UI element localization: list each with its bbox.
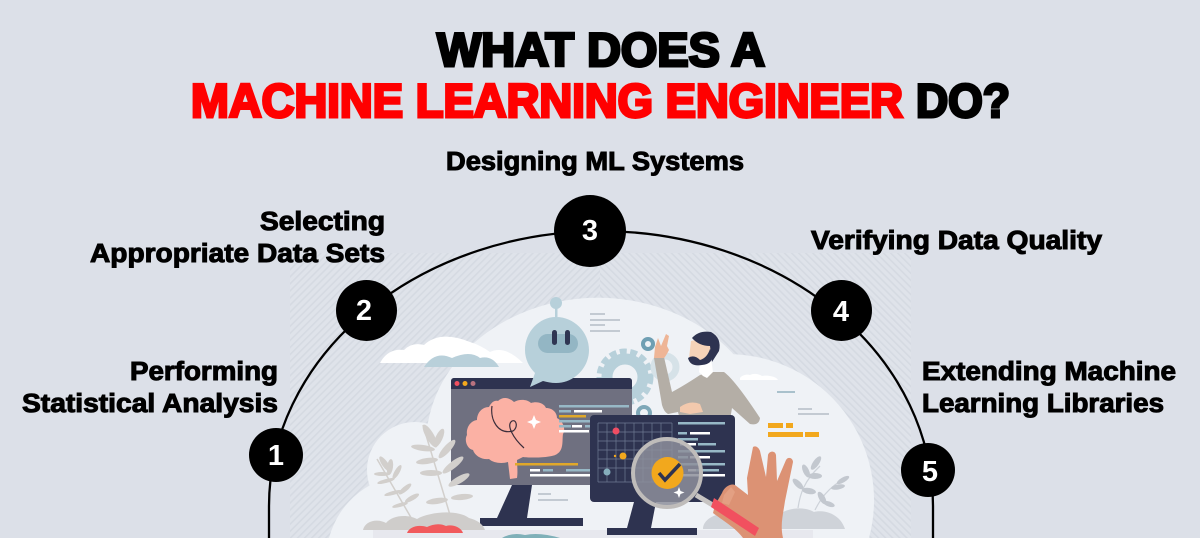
step 2: label: Selecting [260,208,385,236]
title: MACHINE LEARNING ENGINEER [191,74,903,127]
step 1: label: Performing [130,358,278,386]
title: DO? [916,74,1010,127]
engineer [654,332,760,424]
illustration: machine learning engineer scene [290,253,911,538]
right monitor with chart [590,415,735,535]
step 5: label [922,358,1176,418]
brain [466,398,564,479]
step 4: label: Verifying Data Quality [811,227,1103,255]
step 5: label: Extending Machine [922,358,1176,386]
pale background blobs [329,298,874,538]
hand holding magnifier [711,446,793,538]
step 1: label: Statistical Analysis [22,390,278,418]
step 4: circle: 4 [833,296,849,328]
step 1: circle: 1 [268,440,284,472]
step 5: circle: 5 [922,456,938,488]
step 5: circle [901,443,955,497]
step 1: circle [249,428,303,482]
step 3: circle: 3 [582,215,598,247]
beard [688,349,713,365]
raised hand [654,334,669,358]
step 3: circle [554,195,626,267]
left monitor [451,378,632,526]
right plants [703,455,850,529]
magnifier with checkmark [633,439,716,507]
step 2: circle: 2 [356,295,372,327]
hand on chest [680,403,703,414]
left plants [363,423,485,533]
step 2: label [90,208,385,268]
title: WHAT DOES A [437,23,765,76]
face [689,337,712,364]
step 1: label [22,358,278,418]
cloud [380,337,523,367]
teal mound at bottom [502,534,560,538]
gears [603,339,676,419]
striped backdrop [290,253,911,538]
small text lines near robot [590,313,620,332]
small text lines under monitor [538,493,568,501]
step 4: circle [811,280,872,341]
step 3: label: Designing ML Systems [446,148,744,176]
floating marks right [740,374,829,437]
step 2: label: Appropriate Data Sets [90,240,385,268]
hair [692,332,720,362]
robot speech bubble [525,297,589,387]
title [191,23,1010,127]
neck and collar [699,358,713,378]
step 5: label: Learning Libraries [922,390,1164,418]
step 2: circle [336,280,397,341]
arc connecting the numbered steps [269,231,933,538]
